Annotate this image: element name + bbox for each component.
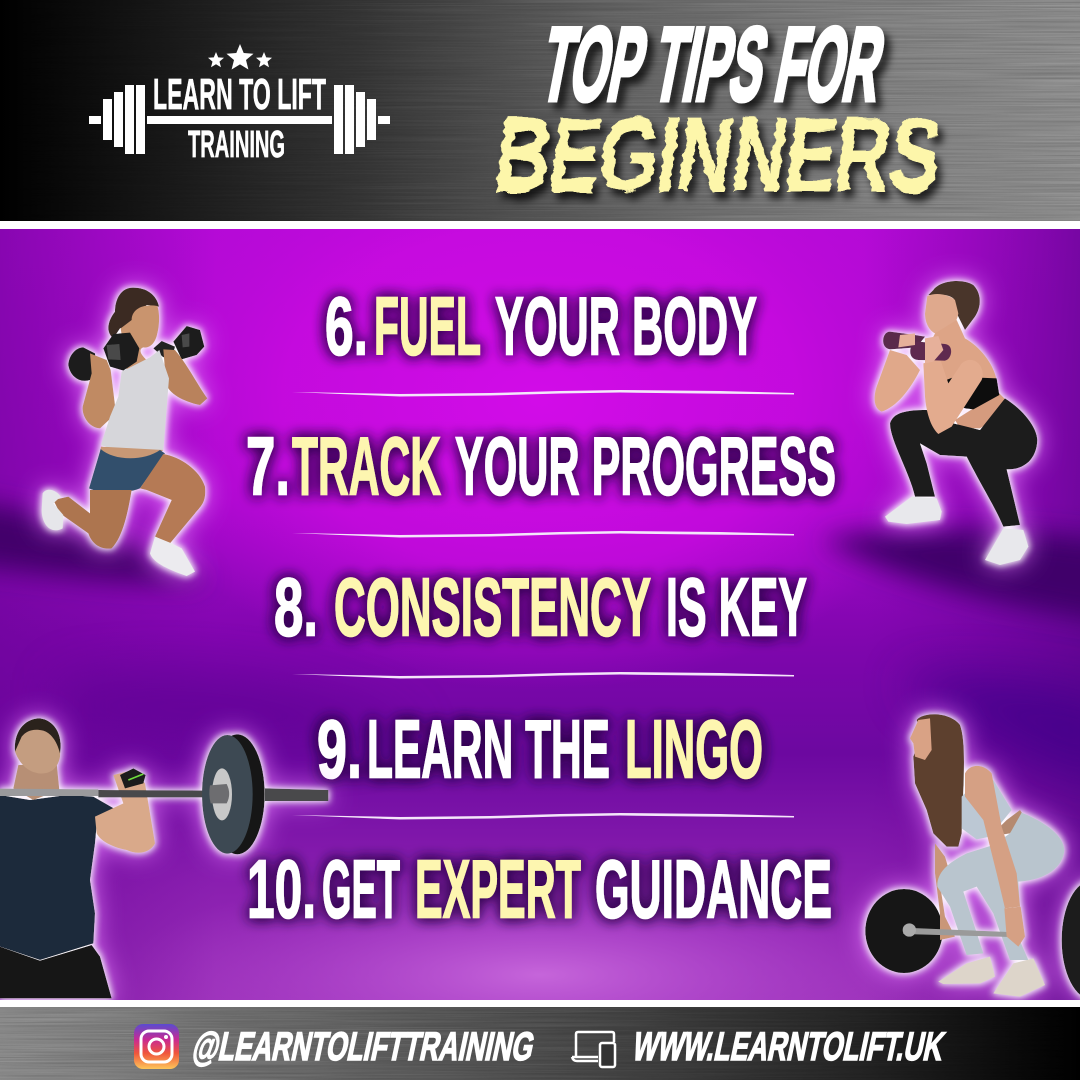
tip 10 <box>247 842 832 936</box>
tip list <box>246 280 836 936</box>
icon: laptop and phone <box>572 1032 615 1067</box>
panel: purple main background <box>0 229 1080 1000</box>
tip 8: IS KEY <box>666 560 807 654</box>
tip 9: LEARN THE <box>367 702 610 796</box>
tip 9: LINGO <box>625 702 763 796</box>
tip 6 <box>325 280 757 372</box>
tip 8: CONSISTENCY <box>334 560 651 654</box>
panel: footer metal band <box>0 1007 1080 1080</box>
logo: Learn to Lift Training <box>89 44 390 166</box>
panel: header metal band <box>0 0 1080 221</box>
tip 10: EXPERT <box>415 842 581 936</box>
divider 7 <box>292 531 794 538</box>
divider 8 <box>292 672 794 678</box>
tip 10: GET <box>322 842 400 936</box>
tip 8: 8. <box>274 560 318 654</box>
photo: man lifting barbell <box>0 718 328 998</box>
tip 6: FUEL <box>374 280 481 372</box>
photo: woman lunging with dumbbells <box>42 288 207 576</box>
divider 6 <box>292 390 794 396</box>
divider 9 <box>292 813 794 820</box>
tip 10: GUIDANCE <box>595 842 832 936</box>
tip 7 <box>246 420 836 512</box>
photo: woman squatting with dumbbells <box>875 281 1037 565</box>
tip 6: YOUR BODY <box>495 280 757 372</box>
logo: Learn to Lift Training: TRAINING <box>188 124 285 166</box>
photo: woman deadlifting barbell <box>865 714 1080 999</box>
tip 6: 6. <box>325 280 368 372</box>
tip 9: 9. <box>317 702 362 796</box>
icon: instagram <box>134 1024 179 1069</box>
logo: Learn to Lift Training: LEARN TO LIFT <box>153 70 326 119</box>
tip 7: 7. <box>246 420 290 512</box>
tip 7: TRACK <box>292 420 441 512</box>
tip 10: 10. <box>247 842 316 936</box>
handle text: @LEARNTOLIFTTRAINING <box>189 1023 539 1069</box>
